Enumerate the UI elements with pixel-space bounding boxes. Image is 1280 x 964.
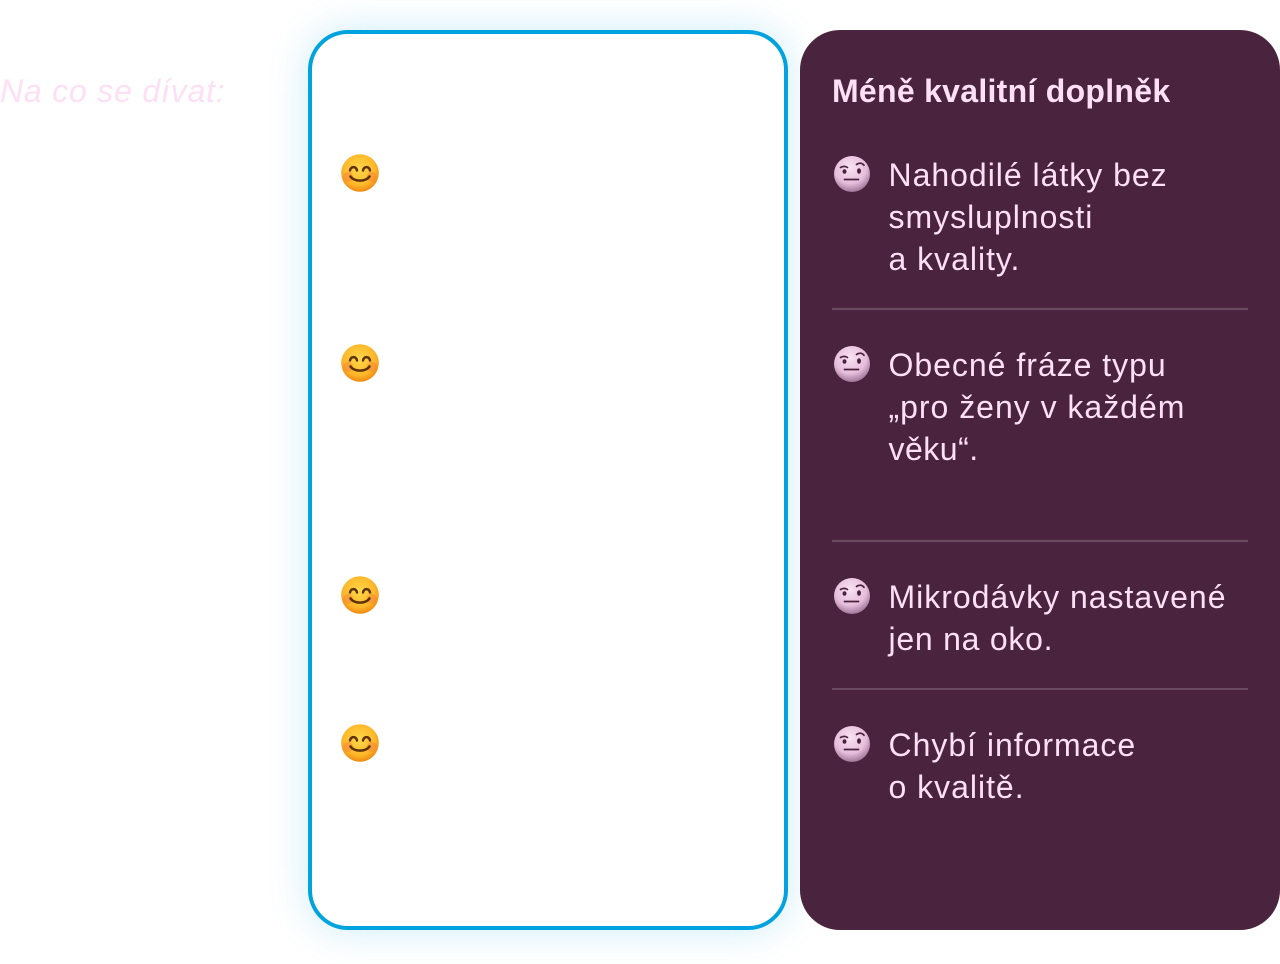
item: random substances [834, 156, 1168, 277]
item text [888, 347, 1185, 467]
item: generic phrases [834, 346, 1185, 467]
divider [832, 688, 1248, 690]
item text: Chybí informace [888, 727, 1136, 763]
icon: skeptical face 2 [834, 346, 870, 382]
item text: věku“. [888, 431, 979, 467]
item text: a kvality. [888, 241, 1020, 277]
item text [888, 727, 1136, 805]
item text [888, 579, 1226, 657]
icon: skeptical face 3 [834, 578, 870, 614]
divider [832, 540, 1248, 542]
icon: skeptical face 1 [834, 156, 870, 192]
item text: Mikrodávky nastavené [888, 579, 1226, 615]
panel heading: Méně kvalitní doplněk [832, 73, 1170, 109]
item text: Nahodilé látky bez [888, 157, 1168, 193]
icon: skeptical face 4 [834, 726, 870, 762]
panel: lower quality supplement [800, 30, 1280, 930]
item: micro doses [834, 578, 1226, 657]
icon: smile 2 [341, 344, 379, 382]
icon: smile 3 [341, 576, 379, 614]
item text: Obecné fráze typu [888, 347, 1167, 383]
side label: Na co se dívat: [0, 73, 225, 109]
item text: o kvalitě. [888, 769, 1025, 805]
divider [832, 308, 1248, 310]
item text: smysluplnosti [888, 199, 1093, 235]
item: missing quality info [834, 726, 1136, 805]
icon: smile 4 [341, 724, 379, 762]
item text [888, 157, 1168, 277]
panel: quality supplement card [308, 30, 788, 930]
item text: „pro ženy v každém [888, 389, 1185, 425]
item text: jen na oko. [888, 621, 1053, 657]
icon: smile 1 [341, 154, 379, 192]
